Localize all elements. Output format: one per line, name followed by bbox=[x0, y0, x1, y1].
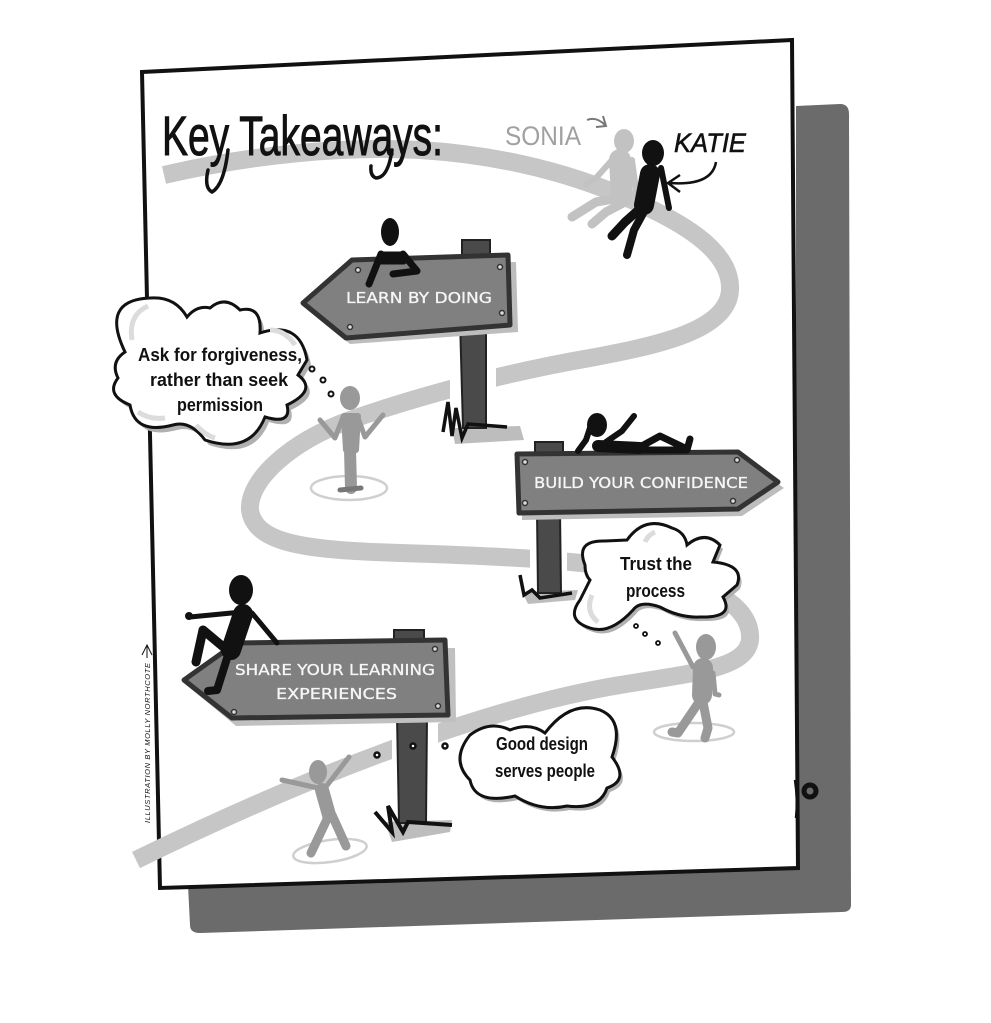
sign: Learn by doing bbox=[303, 255, 518, 344]
thought dots: trust bbox=[634, 624, 660, 645]
thought dots: good design bbox=[374, 744, 448, 758]
cloud: good design: Good design bbox=[496, 734, 588, 754]
sign post: Share your learning bbox=[375, 630, 452, 842]
illustrator credit: ILLUSTRATION BY MOLLY NORTHCOTE bbox=[143, 662, 152, 823]
page panel bbox=[142, 40, 798, 888]
sign: Share your learning experiences: EXPERIENCES bbox=[276, 685, 397, 703]
cloud: forgiveness: permission bbox=[177, 395, 263, 415]
sign: Learn by doing: LEARN BY DOING bbox=[346, 289, 492, 307]
cloud: trust: process bbox=[626, 581, 685, 601]
label: Sonia: SONIA bbox=[505, 121, 581, 151]
cloud: good design bbox=[460, 708, 623, 812]
cloud: forgiveness: rather than seek bbox=[150, 370, 289, 390]
sign: Share your learning experiences: SHARE YOUR LEARNING bbox=[235, 661, 435, 679]
sign: Build your confidence bbox=[517, 452, 784, 520]
sign: Share your learning experiences bbox=[184, 640, 456, 726]
figure: shrugging person bbox=[311, 386, 387, 500]
title bbox=[162, 104, 443, 192]
page shadow bbox=[188, 104, 851, 933]
figure: star-jump person bbox=[282, 757, 368, 867]
figure: person sitting on sign bbox=[186, 575, 277, 691]
binder clip bbox=[795, 780, 816, 818]
cloud: good design: serves people bbox=[495, 761, 595, 781]
sign post: Learn by doing bbox=[443, 240, 524, 444]
cloud: trust bbox=[574, 524, 742, 634]
figure: person lying on sign bbox=[578, 413, 690, 451]
sign: Build your confidence: BUILD YOUR CONFIDENCE bbox=[534, 474, 748, 492]
thought dots: forgiveness bbox=[310, 366, 334, 396]
figure: Sonia sitting bbox=[572, 129, 637, 224]
label: Katie bbox=[668, 128, 747, 192]
cloud: forgiveness bbox=[114, 298, 311, 449]
figure: Katie sitting bbox=[612, 140, 669, 255]
figure: pointing person bbox=[654, 633, 734, 741]
sign post: Build your confidence bbox=[520, 442, 578, 604]
title: Key Takeaways: bbox=[162, 104, 443, 167]
winding road bbox=[136, 149, 750, 860]
cloud: forgiveness: Ask for forgiveness, bbox=[138, 345, 302, 365]
figure: person leaning on sign bbox=[369, 218, 417, 284]
label: Katie: KATIE bbox=[674, 128, 747, 158]
cloud: trust: Trust the bbox=[620, 554, 692, 574]
